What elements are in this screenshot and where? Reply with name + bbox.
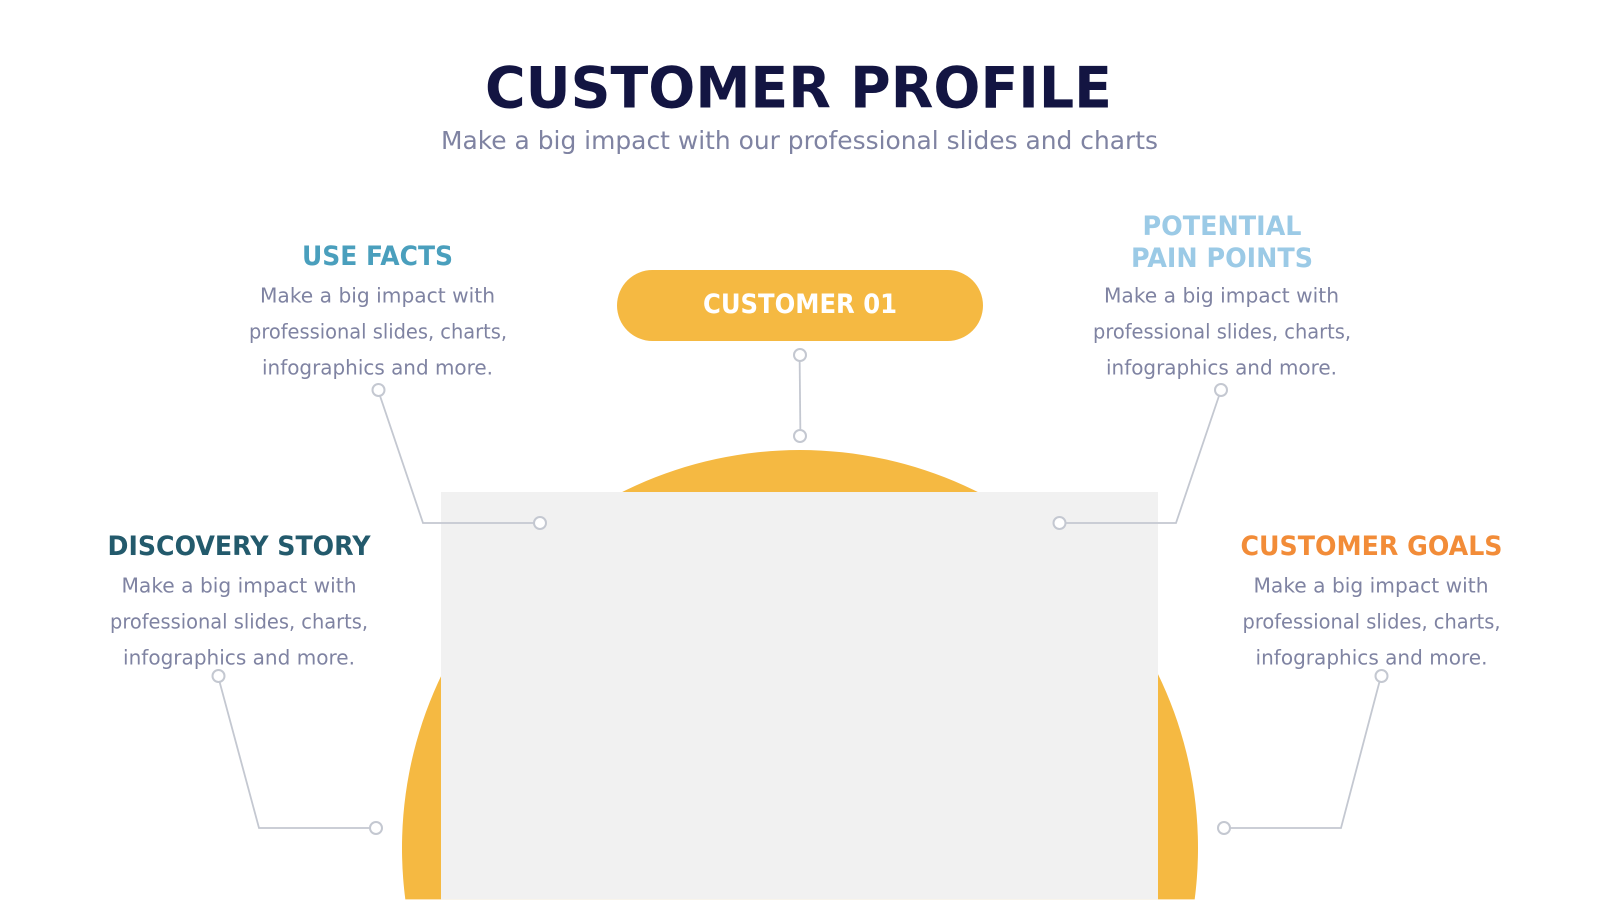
panel: potential pain points: PAIN POINTS [1131,243,1313,274]
central grey image panel [441,492,1158,899]
panel: potential pain points: infographics and more. [1106,356,1337,380]
connector: potential pain points [1054,384,1227,529]
panel: discovery story: Make a big impact with [122,574,356,598]
subtitle: Make a big impact with our professional slides and charts [441,126,1158,155]
panel: customer goals: professional slides, charts, [1242,610,1500,634]
panel: use facts: professional slides, charts, [249,320,507,344]
customer name pill: CUSTOMER 01 [703,289,897,320]
panel: customer goals: CUSTOMER GOALS [1240,531,1502,562]
panel: use facts [249,241,507,380]
panel: use facts: USE FACTS [302,241,453,272]
connector: discovery story [212,670,382,834]
panel: use facts: infographics and more. [262,356,493,380]
customer name pill [617,270,983,341]
panel: discovery story: professional slides, charts, [110,610,368,634]
panel: customer goals [1240,531,1502,670]
connector: use facts [372,384,546,529]
panel: customer goals: Make a big impact with [1254,574,1488,598]
panel: discovery story: DISCOVERY STORY [108,531,371,562]
panel: potential pain points: POTENTIAL [1142,211,1302,242]
panel: discovery story [108,531,371,670]
panel: discovery story: infographics and more. [123,646,355,670]
central yellow circle [402,450,1198,899]
panel: potential pain points: professional slides, charts, [1093,320,1351,344]
panel: use facts: Make a big impact with [260,284,495,308]
connector: customer goals [1218,670,1388,834]
panel: potential pain points: Make a big impact with [1104,284,1339,308]
panel: customer goals: infographics and more. [1256,646,1488,670]
title: CUSTOMER PROFILE [485,56,1112,122]
panel: potential pain points [1093,211,1351,380]
connector: customer pill to circle [794,349,806,442]
